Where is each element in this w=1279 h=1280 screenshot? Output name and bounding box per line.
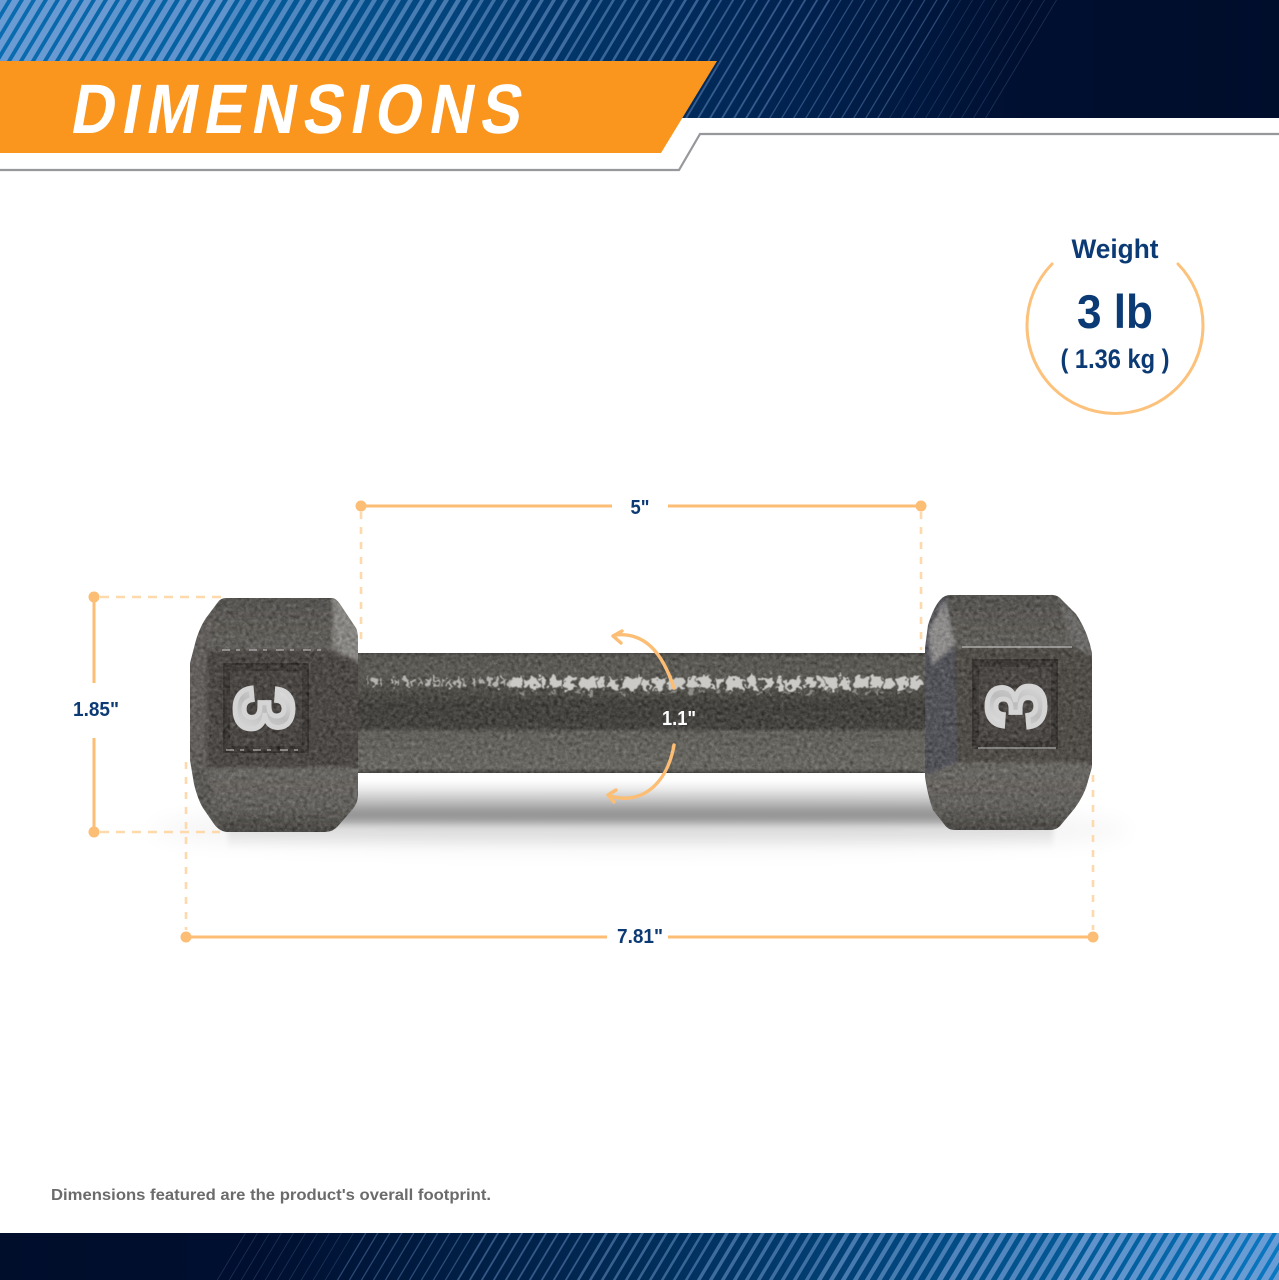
title: DIMENSIONS bbox=[66, 69, 537, 148]
upper curved arrow bbox=[613, 631, 674, 688]
floor shadow bbox=[150, 780, 1130, 850]
weight badge bbox=[1027, 234, 1203, 413]
weight value in kilograms: ( 1.36 kg ) bbox=[1060, 344, 1170, 374]
badge ring bbox=[1027, 264, 1203, 413]
dumbbell bbox=[185, 590, 1100, 840]
left plate number: 3 bbox=[218, 686, 309, 732]
dimension: 1.85 inch head height bbox=[73, 592, 222, 838]
lower curved arrow bbox=[608, 745, 674, 802]
header outline stroke bbox=[0, 134, 1279, 170]
dimension: 5 inch handle length bbox=[356, 497, 926, 650]
dimension: 7.81 inch overall length bbox=[180, 762, 1098, 948]
weight label: Weight bbox=[1072, 234, 1159, 264]
dumbbell handle bbox=[350, 653, 932, 773]
label 7.81 inch: 7.81" bbox=[617, 926, 663, 948]
label 1.85 inch: 1.85" bbox=[73, 699, 119, 721]
orange title banner bbox=[0, 61, 717, 153]
right hex head bbox=[925, 594, 1092, 830]
footnote: Dimensions featured are the product's overall footprint. bbox=[51, 1187, 491, 1204]
left hex head bbox=[190, 598, 358, 832]
label 5 inch: 5" bbox=[630, 497, 650, 519]
dimension: 1.1 inch handle diameter bbox=[608, 631, 696, 802]
weight value in pounds: 3 lb bbox=[1077, 285, 1153, 338]
header band with diagonal stripes bbox=[0, 0, 1279, 118]
label 1.1 inch: 1.1" bbox=[662, 708, 696, 730]
right plate number: 3 bbox=[971, 683, 1062, 729]
footer band with diagonal stripes bbox=[0, 1233, 1279, 1280]
